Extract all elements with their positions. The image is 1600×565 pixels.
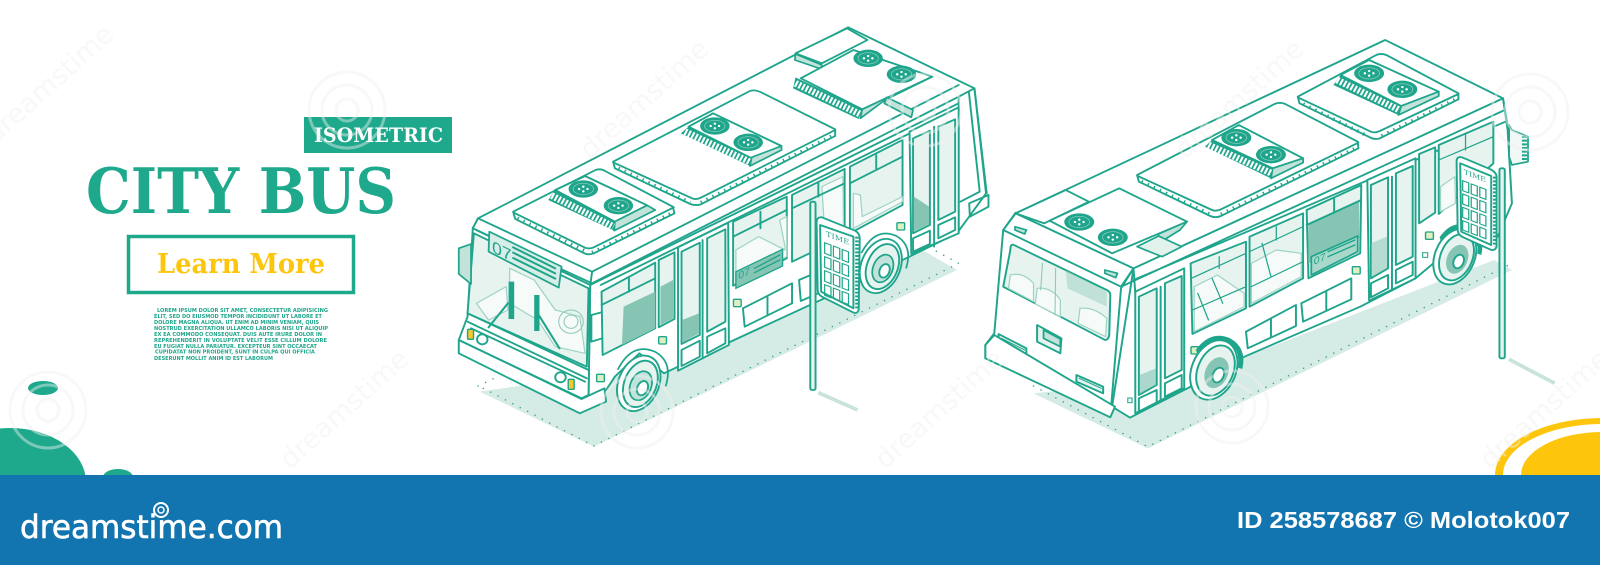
text block: lorem ipsum: REPREHENDERIT IN VOLUPTATE VELIT ESSE CILLUM DOLORE [154,338,328,344]
narrow window [659,252,675,327]
ground shadow [480,247,957,447]
rear wheel [1424,218,1490,291]
side window three [1307,185,1361,278]
front door [678,223,729,371]
watermark text: dreamstime [869,344,1010,475]
watermark text: dreamstime [274,344,415,475]
roof unit middle [1137,103,1358,217]
rear face [985,213,1134,417]
post shadow [818,393,858,410]
roof lights [1015,227,1117,278]
side window three [792,169,845,262]
bus stop post [810,202,816,390]
badge: isometric [304,117,452,153]
front wheel [605,342,676,419]
title: CITY BUS [86,154,396,228]
roof panel front [1016,188,1187,257]
marker lights [597,223,905,382]
dotted ground outline [478,250,959,446]
decorative teal blob: small upper [28,381,58,395]
side window four [850,140,903,233]
rear door [910,107,959,254]
side window three: 07 [1314,251,1326,268]
luggage panels [1246,278,1351,348]
headlights and plate [468,329,574,389]
post shadow [1509,359,1555,383]
bus rear edge [959,85,988,233]
text block: lorem ipsum: EX EA COMMODO CONSEQUAT. DUIS AUTE IRURE DOLOR IN [154,332,322,338]
bus side body [1112,98,1512,418]
roof unit one [513,169,675,254]
text block: lorem ipsum: ELIT, SED DO EIUSMOD TEMPOR INCIDIDUNT UT LABORE ET [154,314,323,320]
rear light block [1509,125,1528,165]
decorative teal blob: small lower [103,469,133,485]
text block: lorem ipsum: DESERUNT MOLLIT ANIM ID EST LABORUM [154,356,273,362]
side window two: 07 [738,265,750,282]
roof unit rear [1298,54,1458,139]
left mirror [459,244,471,284]
decorative teal blob: large [0,428,86,536]
front wheel [1180,329,1252,407]
roof edge lines [476,85,959,285]
button: learn more: Learn More [157,249,325,280]
bus side body [589,85,986,397]
narrow and last windows [1419,122,1493,223]
text block: lorem ipsum: EU FUGIAT NULLA PARIATUR. EXCEPTEUR SINT OCCAECAT [154,344,318,350]
timetable sign [817,217,860,313]
timetable sign: TIME [1464,167,1486,184]
dotted ground outline [1034,263,1512,447]
side window one [1191,242,1246,334]
rear door [1367,158,1416,301]
roof unit two [613,90,835,205]
ground shadow [1034,260,1512,448]
watermark text: dreamstime [1169,34,1310,165]
watermark spirals [10,72,1568,448]
footer logo: dreamstime.com: dreamstime.com [20,508,283,546]
text block: lorem ipsum: CUPIDATAT NON PROIDENT, SUNT IN CULPA QUI OFFICIA [155,350,315,356]
button: learn more [128,236,354,292]
front door [1135,268,1184,413]
footer bar [0,475,1600,565]
rear vents [999,325,1103,393]
text block: lorem ipsum: LOREM IPSUM DOLOR SIT AMET, CONSECTETUR ADIPISICING [157,308,328,314]
front face [459,218,590,398]
text block: lorem ipsum: DOLORE MAGNA ALIQUA. UT ENIM AD MINIM VENIAM, QUIS [154,320,319,326]
illustration: bus two, rear view with stop sign [985,40,1555,448]
footer credit: ID 258578687 © Molotok007 [1237,507,1570,533]
roof [1016,40,1503,268]
text block: lorem ipsum [154,308,328,362]
right mirror [591,311,608,342]
side window one [602,263,655,355]
watermark text: dreamstime [574,34,715,165]
roof unit three [793,28,932,119]
rear bumper [985,335,1115,417]
marker lights [1128,232,1433,403]
side window two [1250,213,1303,307]
roof [473,27,974,283]
rear window with seats [1003,245,1110,340]
side window two [733,197,787,288]
windshield and cab interior [468,233,589,382]
timetable sign: TIME [826,229,849,247]
destination sign [489,232,562,288]
timetable sign [1457,157,1497,250]
illustration: bus one, front view with stop sign [459,27,988,447]
bus stop post [1499,168,1505,358]
luggage panels [743,272,818,327]
roof edge lines [1003,98,1508,293]
destination sign: 07 [492,237,512,265]
decorative yellow ring and blob [1495,418,1600,532]
front bumper [459,340,606,413]
text block: lorem ipsum: NOSTRUD EXERCITATION ULLAMCO LABORIS NISI UT ALIQUIP [154,326,328,332]
rear wheel [849,227,916,300]
badge: isometric: ISOMETRIC [314,123,443,147]
